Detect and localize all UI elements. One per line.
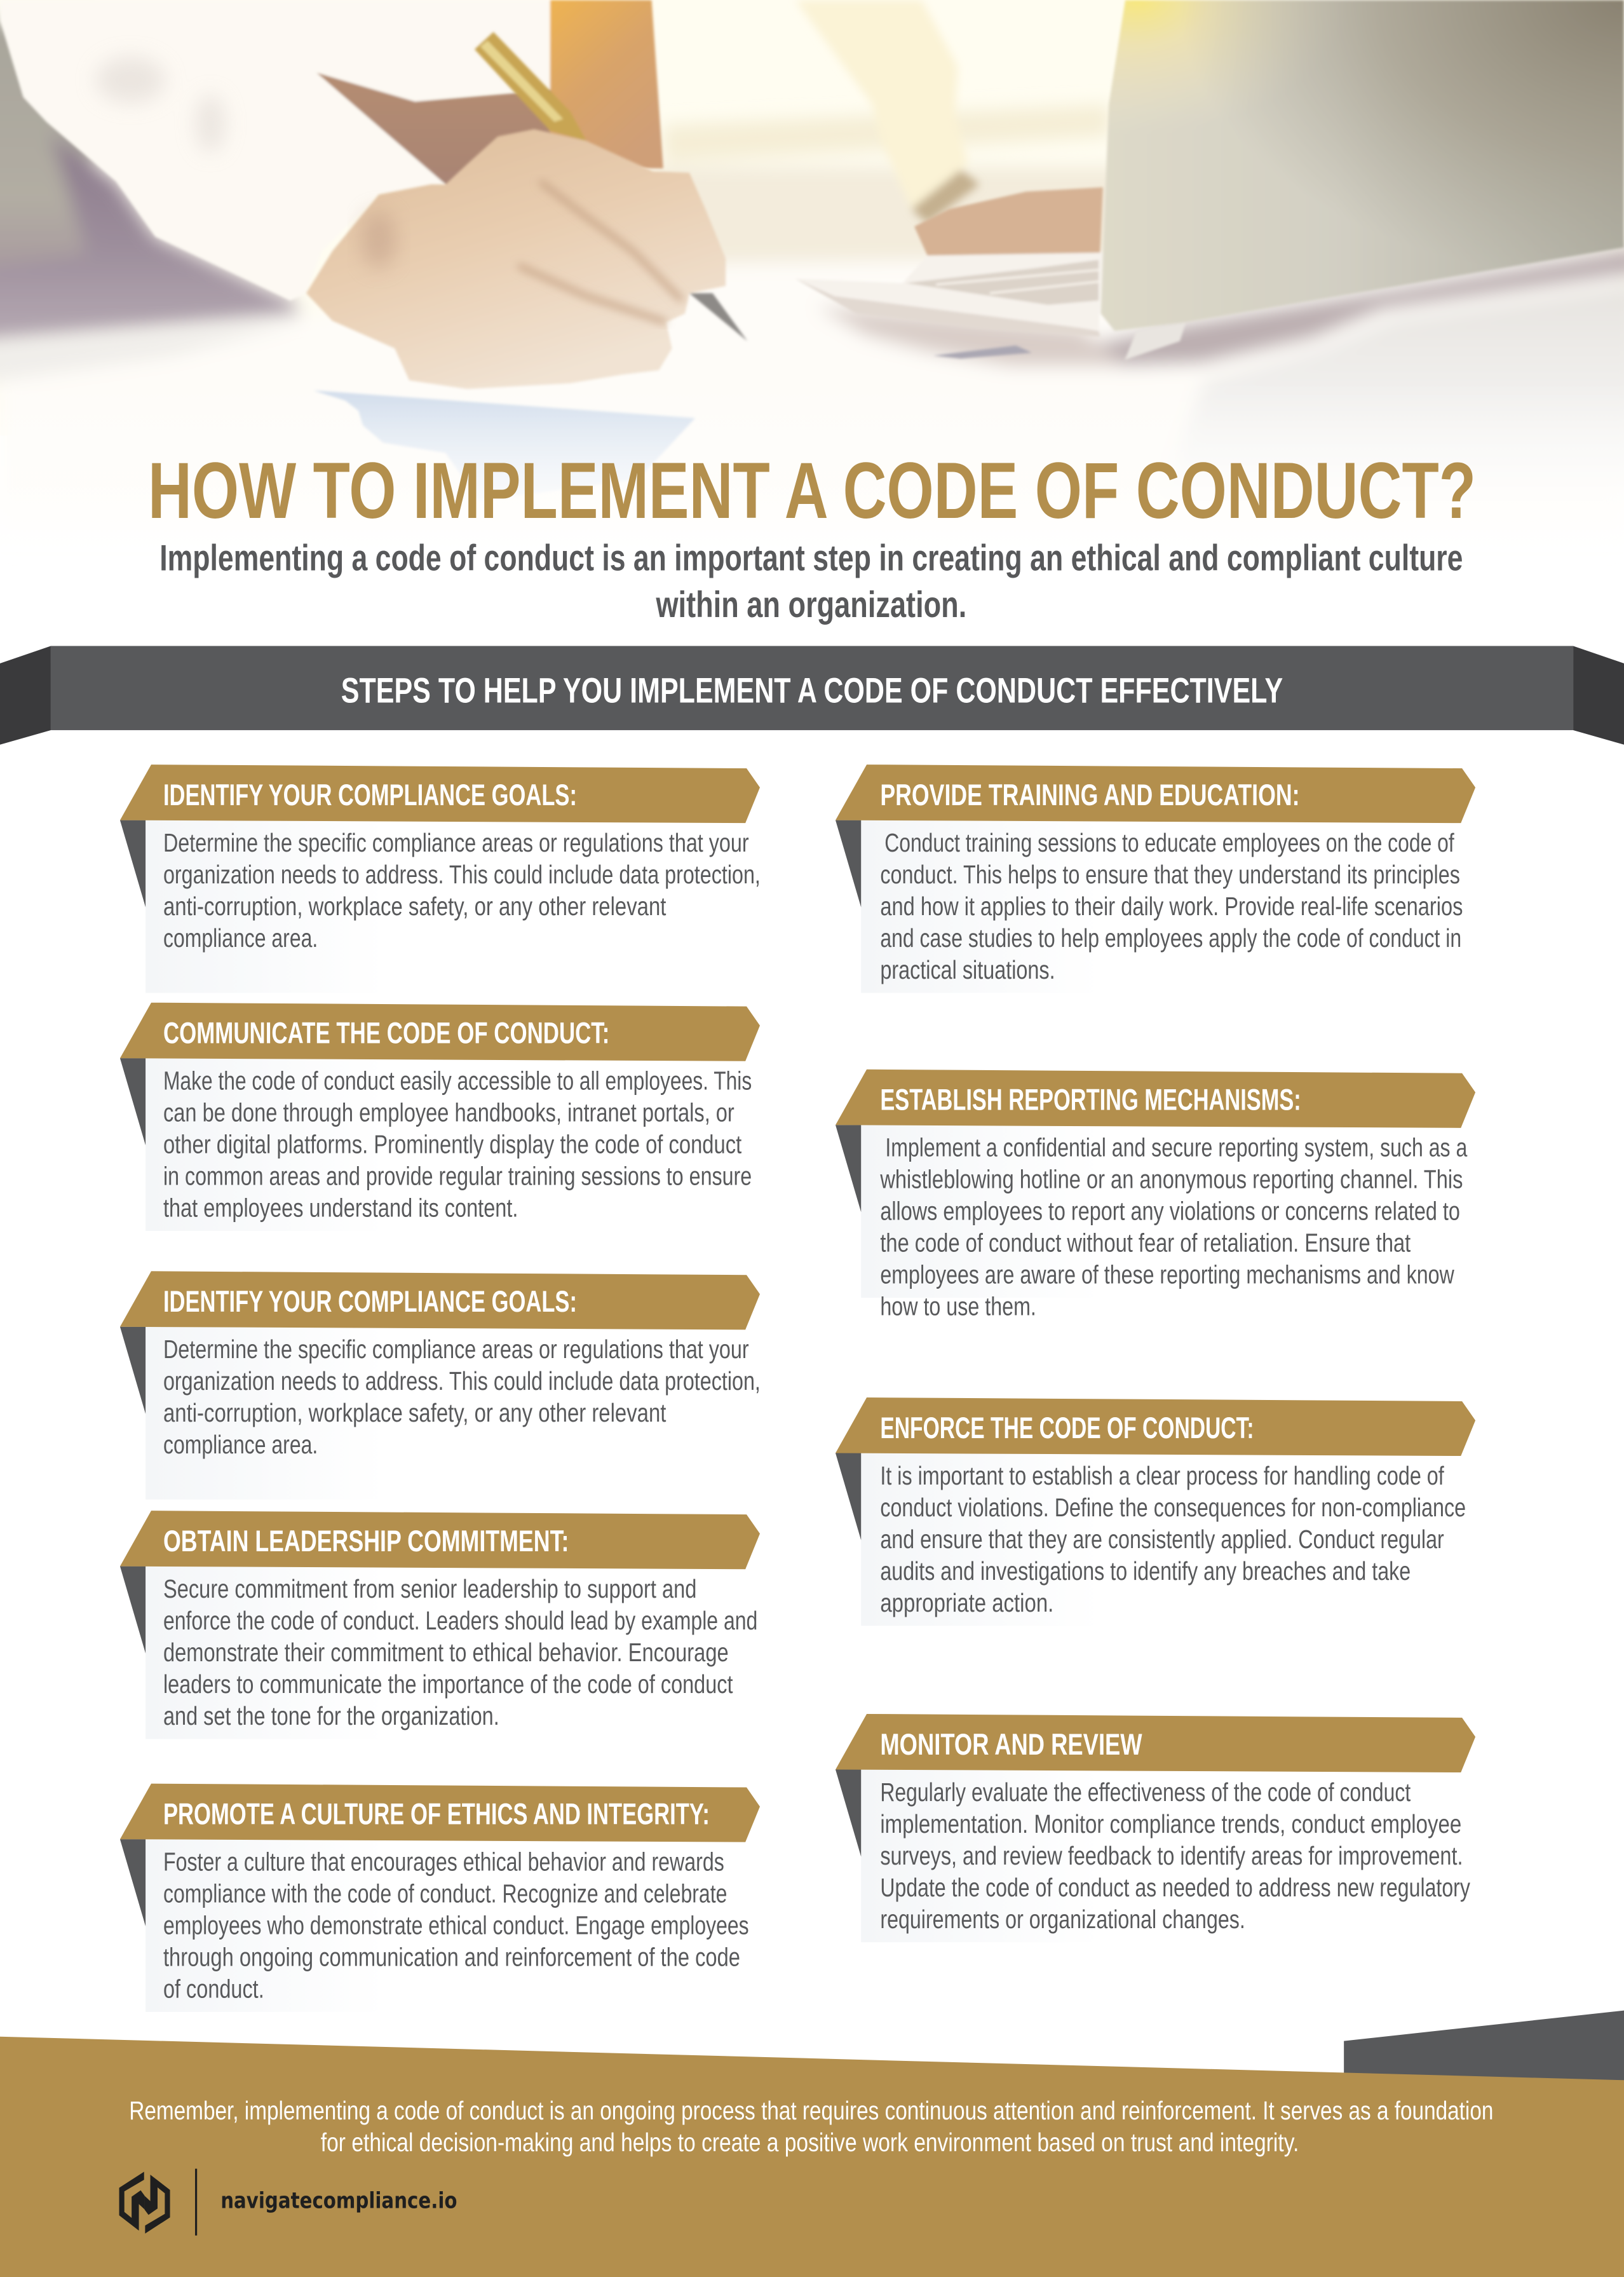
- laptop stand: [1125, 322, 1186, 360]
- white fade into page: [0, 380, 1624, 552]
- footer gold band: [0, 2037, 1624, 2277]
- banner: [0, 646, 1624, 745]
- step body: organization needs to address. This could include data protection,: [163, 860, 761, 889]
- finger crease one: [540, 182, 682, 301]
- step fold: [120, 1058, 145, 1145]
- step panel: [861, 1453, 1100, 1626]
- step panel: [145, 1567, 385, 1739]
- step heading: PROMOTE A CULTURE OF ETHICS AND INTEGRITY:: [163, 1798, 710, 1832]
- pen highlight: [480, 41, 563, 122]
- step body: leaders to communicate the importance of the code of conduct: [163, 1669, 733, 1699]
- step body: how to use them.: [880, 1292, 1036, 1321]
- step ribbon: [120, 765, 760, 823]
- hero sharp scene: [0, 0, 663, 301]
- banner right fold: [1573, 646, 1624, 745]
- footer: [0, 2011, 1624, 2277]
- pale table edge left: [0, 322, 302, 384]
- step body: allows employees to report any violations or concerns related to: [880, 1197, 1460, 1226]
- step body: Conduct training sessions to educate employees on the code of: [884, 828, 1454, 857]
- hero photo: hand writing beside laptop: [0, 0, 1624, 552]
- step body: that employees understand its content.: [163, 1193, 518, 1223]
- step body: implementation. Monitor compliance trends, conduct employee: [880, 1809, 1461, 1839]
- step ribbon: [836, 765, 1475, 823]
- step body: whistleblowing hotline or an anonymous reporting channel. This: [880, 1165, 1463, 1194]
- screen shadow on table: [1016, 247, 1624, 366]
- banner bar: [51, 646, 1573, 730]
- chart in blue: [313, 390, 695, 501]
- footer text: for ethical decision-making and helps to create a positive work environment based on trust and integrity.: [321, 2128, 1299, 2157]
- step: identify your compliance goals (1): [120, 765, 761, 993]
- step ribbon: [836, 1070, 1475, 1128]
- step: enforce the code of conduct: [836, 1397, 1475, 1626]
- step fold: [836, 820, 861, 907]
- mauve shadow at left: [0, 133, 302, 341]
- step body: of conduct.: [163, 1975, 264, 2004]
- logo: [119, 2169, 457, 2236]
- step body: Foster a culture that encourages ethical behavior and rewards: [163, 1847, 724, 1876]
- keyboard: [905, 260, 1099, 305]
- step body: Update the code of conduct as needed to address new regulatory: [880, 1873, 1470, 1902]
- footer text: [129, 2096, 1493, 2157]
- step body: [880, 1133, 1468, 1321]
- logo wordmark: navigatecompliance.io: [220, 2188, 457, 2213]
- step body: and how it applies to their daily work. Provide real-life scenarios: [880, 892, 1463, 921]
- step body: conduct. This helps to ensure that they understand its principles: [880, 860, 1460, 889]
- step: communicate the code of conduct: [120, 1003, 760, 1231]
- step body: and case studies to help employees apply the code of conduct in: [880, 923, 1461, 953]
- screen yellow glow: [1100, 0, 1624, 331]
- laptop underside shadow: [817, 306, 1125, 366]
- hero foreground: [306, 0, 1624, 501]
- subtitle line 2: within an organization.: [656, 585, 966, 625]
- step body: conduct violations. Define the consequences for non-compliance: [880, 1493, 1466, 1522]
- step body: Regularly evaluate the effectiveness of the code of conduct: [880, 1777, 1411, 1807]
- wrist shadow: [362, 210, 396, 269]
- step body: and set the tone for the organization.: [163, 1701, 499, 1730]
- keyboard row two: [990, 282, 1099, 293]
- step body: [163, 1847, 749, 2004]
- laptop base: [795, 252, 1103, 330]
- step body: Secure commitment from senior leadership to support and: [163, 1574, 696, 1603]
- hero blurred background: [0, 20, 1624, 545]
- step body: employees who demonstrate ethical conduct. Engage employees: [163, 1910, 749, 1940]
- step body: through ongoing communication and reinforcement of the code: [163, 1942, 740, 1971]
- step ribbon: [120, 1003, 760, 1061]
- banner text: STEPS TO HELP YOU IMPLEMENT A CODE OF CONDUCT EFFECTIVELY: [341, 670, 1283, 710]
- step body: [163, 828, 761, 953]
- step ribbon: [120, 1511, 760, 1569]
- keyboard rows: [936, 270, 1099, 293]
- logo divider: [195, 2169, 197, 2236]
- second arm sleeve: [795, 0, 968, 209]
- hero backdrop window: [0, 0, 1624, 435]
- step body: and ensure that they are consistently applied. Conduct regular: [880, 1525, 1444, 1554]
- step body: [880, 828, 1463, 984]
- step panel: [145, 1058, 385, 1231]
- step body: organization needs to address. This could include data protection,: [163, 1366, 761, 1396]
- step body: Determine the specific compliance areas or regulations that your: [163, 1335, 749, 1364]
- step panel: [861, 1769, 1100, 1942]
- step fold: [120, 1327, 145, 1414]
- step heading: COMMUNICATE THE CODE OF CONDUCT:: [163, 1017, 609, 1050]
- step body: compliance area.: [163, 1430, 318, 1459]
- second hand: [914, 187, 1103, 255]
- step panel: [145, 820, 385, 993]
- orange column: [550, 0, 663, 168]
- small chart on paper: [933, 346, 1032, 358]
- step body: [880, 1777, 1470, 1934]
- step heading: OBTAIN LEADERSHIP COMMITMENT:: [163, 1525, 569, 1558]
- step heading: IDENTIFY YOUR COMPLIANCE GOALS:: [163, 778, 577, 812]
- step heading: IDENTIFY YOUR COMPLIANCE GOALS:: [163, 1285, 577, 1319]
- step body: in common areas and provide regular training sessions to ensure: [163, 1162, 752, 1191]
- second arm, blurred: [795, 0, 980, 224]
- step body: requirements or organizational changes.: [880, 1905, 1245, 1934]
- step panel: [861, 820, 1100, 993]
- step body: can be done through employee handbooks, intranet portals, or: [163, 1098, 734, 1127]
- step body: anti-corruption, workplace safety, or any other relevant: [163, 892, 666, 921]
- brown wall behind arm: [316, 72, 558, 189]
- step panel: [145, 1327, 385, 1500]
- step body: the code of conduct without fear of retaliation. Ensure that: [880, 1228, 1411, 1258]
- step body: [163, 1574, 757, 1730]
- step body: employees are aware of these reporting mechanisms and know: [880, 1260, 1454, 1289]
- step fold: [120, 1567, 145, 1654]
- step panel: [861, 1125, 1100, 1298]
- step panel: [145, 1839, 385, 2012]
- step: obtain leadership commitment: [120, 1511, 760, 1739]
- table surface: [0, 250, 1624, 545]
- step body: compliance area.: [163, 923, 318, 953]
- step fold: [836, 1769, 861, 1856]
- step ribbon: [836, 1397, 1475, 1456]
- wall below window: [653, 167, 1132, 269]
- step ribbon: [120, 1271, 760, 1329]
- shirt and sleeve: [0, 0, 550, 301]
- pen nib: [689, 293, 747, 341]
- step body: [163, 1066, 752, 1223]
- step ribbon: [120, 1784, 760, 1842]
- step body: [163, 1335, 761, 1459]
- grey table at right: [1161, 283, 1624, 494]
- step: provide training and education: [836, 765, 1475, 993]
- step body: Determine the specific compliance areas or regulations that your: [163, 828, 749, 857]
- step: monitor and review: [836, 1714, 1475, 1942]
- step body: It is important to establish a clear process for handling code of: [880, 1461, 1444, 1490]
- step fold: [836, 1125, 861, 1212]
- step: promote a culture of ethics and integrity: [120, 1784, 760, 2012]
- sleeve fold shadows: [96, 57, 225, 153]
- screen dark top right: [1100, 0, 1624, 331]
- step fold: [120, 1839, 145, 1926]
- step: identify your compliance goals (2): [120, 1271, 761, 1500]
- fold two: [196, 94, 225, 153]
- step fold: [836, 1453, 861, 1540]
- finger crease two: [518, 266, 666, 322]
- step body: other digital platforms. Prominently display the code of conduct: [163, 1130, 741, 1159]
- laptop screen: [1100, 0, 1624, 331]
- step body: appropriate action.: [880, 1588, 1053, 1617]
- footer dark corner: [1344, 2011, 1624, 2082]
- step body: demonstrate their commitment to ethical behavior. Encourage: [163, 1638, 729, 1667]
- step ribbon: [836, 1714, 1475, 1772]
- step heading: ESTABLISH REPORTING MECHANISMS:: [880, 1084, 1301, 1117]
- banner left fold: [0, 646, 51, 745]
- base lower edge: [795, 279, 1100, 337]
- keyboard row one: [936, 270, 1099, 285]
- step body: compliance with the code of conduct. Recognize and celebrate: [163, 1879, 727, 1908]
- step fold: [120, 820, 145, 907]
- step body: practical situations.: [880, 955, 1055, 984]
- logo mark: [119, 2172, 170, 2234]
- subtitle: [159, 538, 1463, 625]
- step body: [880, 1461, 1466, 1617]
- step body: anti-corruption, workplace safety, or any other relevant: [163, 1398, 666, 1427]
- step heading: PROVIDE TRAINING AND EDUCATION:: [880, 778, 1299, 812]
- grey wall left: [0, 20, 94, 275]
- watch: [911, 170, 980, 224]
- step heading: ENFORCE THE CODE OF CONDUCT:: [880, 1411, 1254, 1445]
- fold one: [96, 57, 165, 103]
- writing hand: [306, 129, 726, 389]
- step body: audits and investigations to identify any breaches and take: [880, 1556, 1411, 1586]
- step heading: MONITOR AND REVIEW: [880, 1728, 1142, 1762]
- step body: Make the code of conduct easily accessible to all employees. This: [163, 1066, 752, 1096]
- step body: Implement a confidential and secure reporting system, such as a: [885, 1133, 1468, 1162]
- window sill band: [663, 104, 1110, 163]
- pen barrel: [475, 32, 586, 141]
- step: establish reporting mechanisms: [836, 1070, 1475, 1321]
- step body: enforce the code of conduct. Leaders should lead by example and: [163, 1606, 757, 1635]
- step body: surveys, and review feedback to identify areas for improvement.: [880, 1841, 1463, 1870]
- hand creases: [518, 182, 682, 322]
